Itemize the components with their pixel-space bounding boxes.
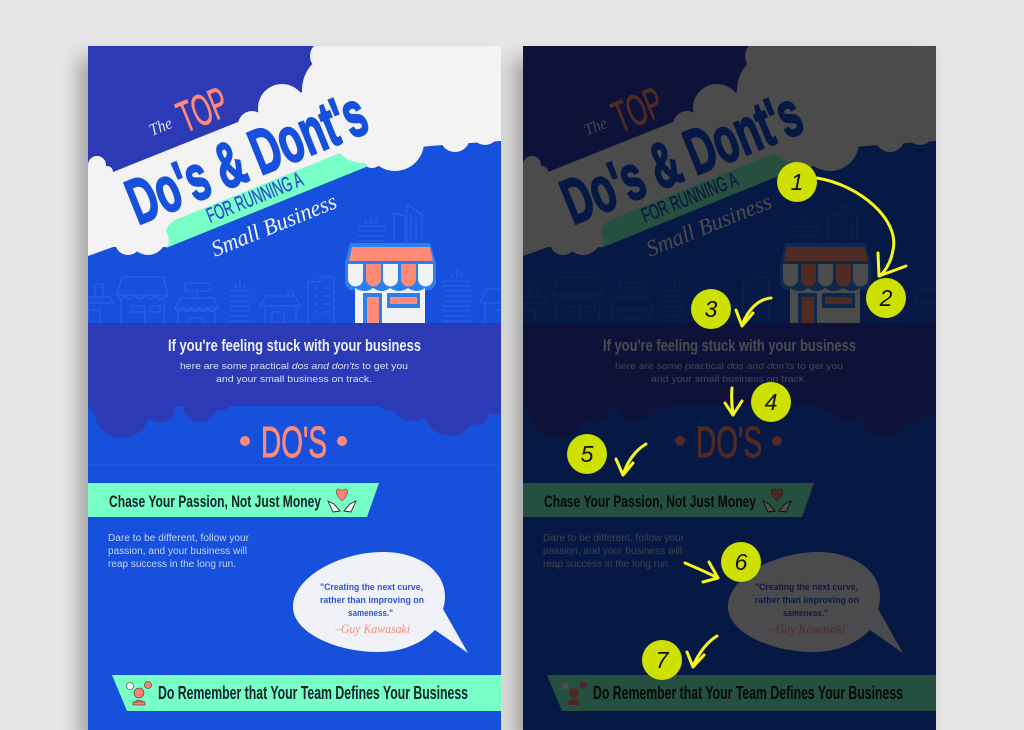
badge 6: 6 bbox=[735, 549, 748, 575]
dimmed title: FOR RUNNING A bbox=[638, 168, 741, 228]
banner: team: Do Remember that Your Team Defines Your Business bbox=[158, 683, 468, 703]
dimmed banner: chase your passion bbox=[523, 483, 814, 517]
icon: storefront bbox=[345, 243, 436, 323]
heading: do's: DO'S bbox=[261, 418, 327, 467]
callout: quote bubble: "Creating the next curve, bbox=[320, 582, 423, 593]
badge 7: 7 bbox=[656, 647, 670, 673]
banner: chase your passion bbox=[88, 483, 379, 517]
dimmed title: The bbox=[581, 113, 610, 140]
dimmed intro band bbox=[523, 323, 942, 438]
dimmed title bbox=[558, 88, 804, 256]
dimmed intro band: here are some practical dos and don'ts to get you bbox=[615, 361, 843, 372]
dimmed title: Do's & Dont's bbox=[551, 77, 812, 238]
dimmed quote bubble: –Guy Kawasaki bbox=[769, 621, 845, 636]
badge 1: 1 bbox=[791, 169, 803, 195]
dimmed text block: reap success in the long run. bbox=[543, 559, 671, 570]
arrow: 3 bbox=[736, 298, 771, 326]
title: Do's & Dont's bbox=[116, 77, 377, 238]
dimmed quote bubble: "Creating the next curve, bbox=[755, 582, 858, 593]
badge 5 bbox=[567, 434, 607, 474]
white cloud banner bbox=[88, 41, 501, 256]
callout: quote bubble: sameness." bbox=[348, 608, 393, 619]
callout: quote bubble: rather than improving on bbox=[320, 595, 424, 606]
dimmed text block: passion, and your business will bbox=[543, 546, 682, 557]
dimmed banner: chase your passion: Chase Your Passion, Not Just Money bbox=[544, 492, 756, 511]
callout: quote bubble bbox=[293, 552, 468, 653]
dimmed text block bbox=[543, 533, 685, 570]
title: TOP bbox=[170, 78, 235, 142]
arrow: 5 bbox=[616, 444, 646, 475]
numbered badges bbox=[567, 162, 906, 680]
header dark diagonal background bbox=[88, 46, 314, 172]
text block: passion bbox=[108, 533, 250, 570]
icon: heart in hands bbox=[328, 489, 356, 512]
dimmed quote bubble: rather than improving on bbox=[755, 595, 859, 606]
panel: dimmed annotated poster bbox=[523, 41, 942, 730]
dimmed intro band: If you're feeling stuck with your business bbox=[603, 336, 856, 355]
badge 4 bbox=[751, 382, 791, 422]
title: The bbox=[146, 113, 175, 140]
mint ribbon bbox=[166, 153, 366, 248]
dimmed text block: Dare to be different, follow your bbox=[543, 533, 685, 544]
heading: do's bbox=[240, 426, 347, 458]
badge 3: 3 bbox=[705, 296, 718, 322]
icon: team person bbox=[126, 682, 152, 705]
dimmed heading: do's bbox=[675, 426, 782, 458]
badge 6 bbox=[721, 542, 761, 582]
title bbox=[122, 88, 368, 256]
badge 3 bbox=[691, 289, 731, 329]
callout: quote bubble: –Guy Kawasaki bbox=[334, 621, 410, 636]
panel: intro band: If you're feeling stuck with your business bbox=[168, 336, 421, 355]
text block: passion: reap success in the long run. bbox=[108, 559, 236, 570]
badge 4: 4 bbox=[765, 389, 777, 415]
dimmed storefront bbox=[780, 243, 871, 323]
badge 2 bbox=[866, 278, 906, 318]
dimmed quote bubble: sameness." bbox=[783, 608, 828, 619]
panel: bright poster bbox=[88, 41, 507, 730]
badge 5: 5 bbox=[581, 441, 594, 467]
arrow: 7 bbox=[687, 636, 717, 667]
panel: intro band: here are some practical dos and don'ts to get you bbox=[180, 361, 408, 372]
arrow: 4 bbox=[725, 388, 742, 415]
badge 2: 2 bbox=[879, 285, 893, 311]
badge 1 bbox=[777, 162, 817, 202]
city skyline outlines bbox=[88, 204, 503, 323]
panel: intro band: and your small business on track. bbox=[216, 374, 372, 385]
dimmed title: TOP bbox=[605, 78, 670, 142]
arrow: 6 bbox=[685, 562, 718, 582]
title: FOR RUNNING A bbox=[203, 168, 306, 228]
panel: intro band bbox=[88, 323, 507, 438]
dimmed heading: do's: DO'S bbox=[696, 418, 762, 467]
text block: passion: passion, and your business will bbox=[108, 546, 247, 557]
banner: chase your passion: Chase Your Passion, Not Just Money bbox=[109, 492, 321, 511]
arrows: yellow hand-drawn bbox=[616, 178, 906, 667]
banner: team bbox=[112, 675, 501, 711]
badge 7 bbox=[642, 640, 682, 680]
dimmed quote bubble bbox=[728, 552, 903, 653]
dimmed title: Small Business bbox=[643, 189, 775, 262]
text block: passion: Dare to be different, follow your bbox=[108, 533, 250, 544]
arrow: 1 to 2 bbox=[817, 178, 906, 276]
dimmed banner: team bbox=[547, 675, 936, 711]
title: Small Business bbox=[208, 189, 340, 262]
dimmed intro band: and your small business on track. bbox=[651, 374, 807, 385]
